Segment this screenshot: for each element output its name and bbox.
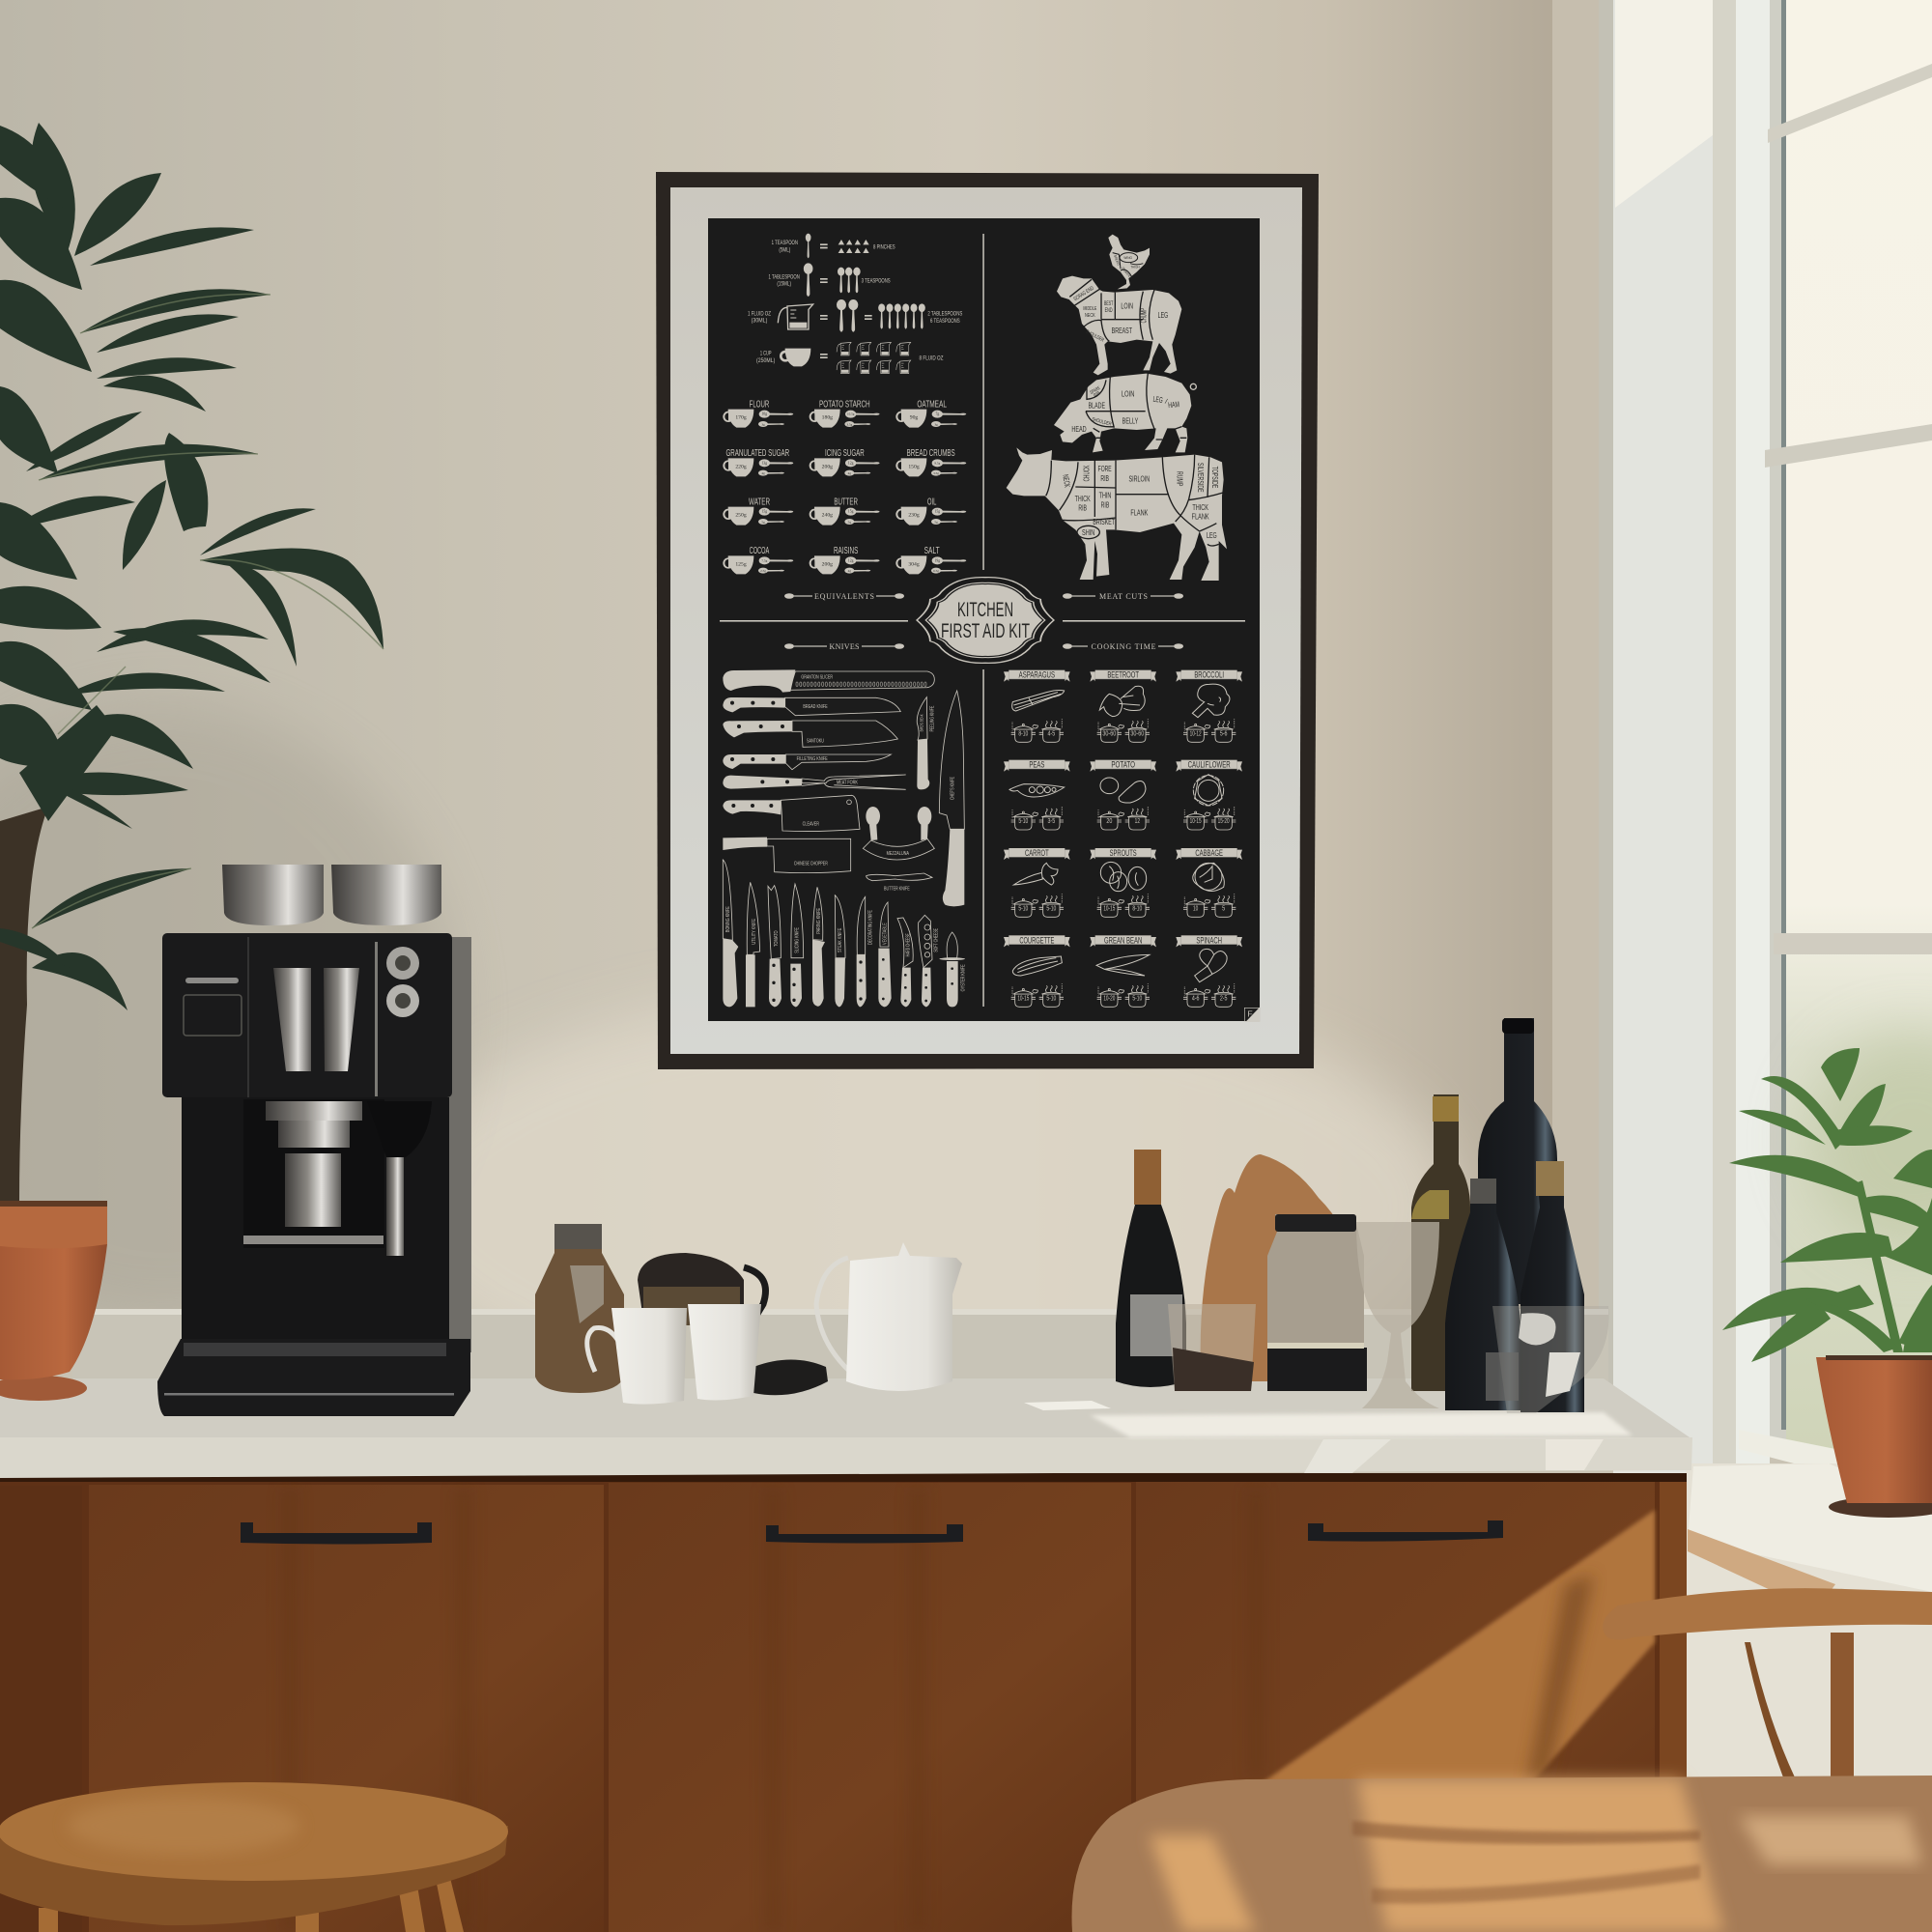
conversion: tablespoon: (15ML) [777, 281, 791, 288]
lamb [1057, 276, 1181, 375]
conversion: fluid oz: 6 TEASPOONS [930, 318, 960, 325]
lamb: NECK [1085, 313, 1095, 319]
right terracotta pot [1816, 1355, 1932, 1518]
knife labels: UTILITY KNIFE [752, 919, 757, 945]
ingredient: butter: BUTTER [834, 497, 858, 507]
ingredient: bread crumbs: 9.5g [934, 461, 941, 465]
plant leaf veins [32, 294, 384, 928]
cow [1007, 447, 1227, 581]
title badge [916, 577, 1055, 664]
cow: FLANK [1130, 508, 1149, 518]
cow: RIB [1101, 499, 1110, 509]
conversion: fluid oz [748, 299, 962, 332]
cow: NECK [1061, 473, 1072, 488]
ingredient: oil: 15g [935, 510, 940, 514]
knife labels: CLEAVER [803, 821, 819, 827]
cow: FORE [1098, 464, 1112, 473]
ingredient: salt: 6.5g [933, 569, 939, 573]
cabinet [0, 1473, 1687, 1932]
wine bottle [1116, 1150, 1186, 1387]
ingredient: water: WATER [749, 497, 770, 507]
cow: RIB [1078, 503, 1087, 513]
cow: RUMP [1175, 471, 1184, 487]
lamb: CHUMP [1138, 308, 1148, 323]
banner titles: CABBAGE [1195, 848, 1223, 858]
ingredient: salt: 304g [908, 561, 920, 567]
ingredient: potato starch: 10.5g [847, 412, 855, 416]
cooking time numbers: 2-5 [1220, 995, 1228, 1002]
machine steel parts [184, 937, 432, 1256]
ingredient: salt [895, 546, 966, 574]
cooking time panel [1004, 670, 1260, 1022]
ingredient: icing sugar: ICING SUGAR [825, 448, 865, 459]
ingredient: bread crumbs [895, 448, 966, 476]
conversion: cup [756, 342, 944, 374]
section label: meat cuts: MEAT CUTS [1099, 592, 1148, 601]
ingredient: raisins: 4g [848, 569, 851, 573]
cow: LEG [1207, 530, 1217, 540]
conversion: fluid oz: 1 FLUID OZ [748, 310, 771, 317]
lamb: MIDDLE [1083, 306, 1096, 312]
pig: LOIN [1122, 388, 1134, 398]
cooking time numbers: 5-10 [1018, 905, 1028, 912]
ingredient: potato starch: 180g [822, 415, 833, 421]
dividers [720, 234, 1245, 1007]
ingredient: icing sugar: 12g [848, 461, 854, 465]
pig: BLADE [1089, 400, 1105, 410]
pig: RIB [1093, 390, 1101, 399]
pots with boiling and steaming times [1011, 719, 1236, 1007]
chicken [1108, 235, 1150, 289]
cooking time numbers: 15-20 [1218, 818, 1230, 825]
lamb: SCRAG END [1073, 286, 1095, 302]
equivalents panel [723, 234, 966, 574]
cooking time numbers: 4-5 [1047, 730, 1055, 737]
cooking time numbers: 8-10 [1132, 905, 1142, 912]
lamb: LOIN [1121, 300, 1133, 310]
cooking time numbers: 12 [1135, 818, 1140, 825]
cooking time numbers: 10-20 [1103, 995, 1115, 1002]
knife labels: MEAT FORK [837, 780, 858, 785]
knife labels: TOMATO [774, 930, 780, 947]
grinder hoppers [222, 865, 441, 925]
knife labels: SANTOKU [807, 738, 824, 744]
ingredient: butter: 5g [848, 520, 851, 524]
knife labels: STEAK KNIFE [838, 928, 843, 952]
dark dish [753, 1360, 828, 1395]
ingredient: cocoa: COCOA [750, 546, 770, 556]
pig: HEAD [1071, 424, 1087, 434]
knife labels: SOFT CHEESE [933, 928, 939, 952]
wall background [0, 0, 1557, 1430]
right plant [1722, 1048, 1932, 1518]
ingredient: bread crumbs: 150g [908, 464, 920, 469]
section label: meat cuts [1063, 592, 1183, 601]
chicken: THIGH [1130, 266, 1140, 270]
cooking time numbers: 10-12 [1190, 730, 1202, 737]
cooking time numbers: 30-60 [1102, 730, 1116, 737]
ingredient: water [723, 497, 793, 526]
cooking time numbers: 10 [1193, 905, 1198, 912]
knife labels: BREAD KNIFE [803, 704, 828, 710]
title badge: FIRST AID KIT [941, 620, 1030, 642]
ingredient: water: 5g [761, 520, 765, 524]
knife labels: HARD CHEESE [906, 933, 912, 956]
ingredient: raisins [810, 546, 880, 574]
backsplash [72, 1309, 1608, 1381]
ingredient: raisins: RAISINS [834, 546, 859, 556]
title badge: KITCHEN [957, 599, 1013, 621]
lamb: END [1105, 308, 1113, 314]
ingredient: butter: 15g [848, 510, 854, 514]
ingredient: icing sugar: 200g [822, 464, 833, 469]
glass jar [535, 1224, 624, 1393]
ingredient: icing sugar: 4g [848, 471, 851, 475]
right plant leaves [1722, 1048, 1932, 1362]
ingredient: raisins: 12g [848, 558, 854, 562]
banner titles: SPROUTS [1110, 848, 1137, 858]
picture frame [656, 172, 1319, 1069]
pig: / [1164, 399, 1168, 406]
banner titles: SPINACH [1196, 935, 1222, 945]
granton dimples [795, 679, 927, 689]
ingredient: oatmeal: 90g [910, 415, 918, 421]
knife labels: SLICING KNIFE [795, 927, 801, 953]
cabinet handles [241, 1520, 1503, 1544]
knife labels: BUTTER KNIFE [884, 886, 910, 892]
ingredient: oatmeal [895, 399, 966, 428]
cooking time numbers: 5 [1222, 905, 1225, 912]
ingredient: bread crumbs: BREAD CRUMBS [907, 448, 955, 459]
window sill and lower wall [1686, 1463, 1932, 1932]
knife labels: OYSTER KNIFE [960, 964, 966, 991]
ingredient: oil: 230g [908, 513, 920, 519]
conversion: tablespoon [768, 263, 891, 297]
section label: cooking time: COOKING TIME [1092, 642, 1156, 651]
knife labels: BIRD'S BEAK [920, 714, 924, 731]
conversion: tablespoon: 1 TABLESPOON [768, 273, 800, 280]
poster [708, 218, 1260, 1022]
conversion: teaspoon: (5ML) [779, 247, 790, 254]
ingredient: salt: 19g [935, 558, 940, 562]
ingredient: flour: 3g [761, 422, 765, 426]
conversion: fluid oz: (30ML) [752, 317, 767, 324]
ingredient: cocoa [723, 546, 793, 574]
lamb: SHOULDER [1085, 329, 1105, 344]
chicken: WING [1123, 256, 1132, 260]
ingredient: flour: 10g [762, 412, 767, 416]
handle rivets [730, 701, 953, 1002]
ingredient: cocoa: 125g [735, 561, 747, 567]
ingredient: water: 15g [762, 510, 767, 514]
conversion: fluid oz: 2 TABLESPOONS [927, 311, 962, 318]
cooking time numbers: 5-10 [1132, 995, 1142, 1002]
knives panel [723, 669, 966, 1007]
ingredient: oil: 5g [934, 520, 938, 524]
conversion: cup: 1 CUP [760, 350, 771, 356]
knife labels: FILLETING KNIFE [797, 756, 828, 762]
knife labels: BONING KNIFE [725, 906, 731, 932]
ingredient: cocoa: 7.5g [761, 558, 768, 562]
pig: BELLY [1122, 416, 1139, 426]
ingredient: granulated sugar: 13g [762, 461, 767, 465]
cooking time numbers: 10-15 [1190, 818, 1202, 825]
banner titles [1019, 670, 1231, 945]
knife labels: CHEF'S KNIFE [950, 777, 955, 800]
conversion: cup: (250ML) [756, 357, 775, 364]
cow: CHUCK [1081, 465, 1091, 481]
banner titles: PEAS [1029, 760, 1044, 770]
knife labels: PARING KNIFE [816, 908, 822, 934]
conversion: teaspoon: 1 TEASPOON [772, 240, 798, 246]
meat cuts panel [1007, 235, 1227, 581]
ingredient: icing sugar [810, 448, 880, 476]
ingredient: oatmeal: OATMEAL [917, 399, 947, 410]
cow: THIN [1099, 491, 1111, 500]
coffee machine [157, 865, 471, 1416]
knife labels: MEZZALUNA [887, 851, 909, 857]
lamb: LEG [1158, 310, 1168, 320]
cooking time numbers [1017, 730, 1230, 1002]
front dark bottle [1445, 1179, 1520, 1410]
chicken: DRUMSTICK [1121, 267, 1133, 280]
blade outlines [723, 671, 964, 968]
knife labels: CHINESE CHOPPER [794, 861, 828, 867]
dark coffee press [638, 1253, 765, 1325]
conversion: teaspoon: 8 PINCHES [873, 244, 895, 251]
table [1072, 1776, 1932, 1932]
ingredient: cocoa: 2.5g [760, 569, 766, 573]
banner titles: POTATO [1111, 760, 1135, 770]
section label: equivalents: EQUIVALENTS [814, 592, 874, 601]
glass bowl and reflections [1486, 1306, 1608, 1413]
conversion: tablespoon: 3 TEASPOONS [862, 278, 891, 285]
plant leaves [0, 123, 384, 1010]
ingredient: granulated sugar: GRANULATED SUGAR [725, 448, 789, 459]
lamb: BEST [1104, 301, 1114, 307]
left terracotta pot [0, 1201, 107, 1401]
cooking time numbers: 10-15 [1103, 905, 1115, 912]
ingredient: oil [895, 497, 966, 526]
white pitcher [816, 1242, 962, 1391]
section label: cooking time [1063, 642, 1183, 651]
ingredient: oatmeal: 7g [936, 412, 939, 416]
right dark bottle [1520, 1161, 1584, 1412]
vegetable icons [1009, 684, 1230, 982]
pig: HAM [1168, 399, 1179, 410]
knife labels: VEGETABLE [883, 923, 889, 945]
ingredient: potato starch: POTATO STARCH [819, 399, 870, 410]
knife labels: DECORATING KNIFE [868, 910, 874, 945]
banner titles: COURGETTE [1019, 935, 1054, 945]
ingredient: butter [810, 497, 880, 526]
cooking time numbers: 10-15 [1017, 995, 1029, 1002]
cooking time numbers: 20 [1106, 818, 1112, 825]
knife handles [723, 669, 965, 1007]
pig [1054, 374, 1196, 452]
ingredient: salt: SALT [924, 546, 940, 556]
cow: THICK [1192, 502, 1208, 512]
chicken: BREAST [1113, 255, 1121, 267]
cow: SIRLOIN [1128, 474, 1150, 484]
ingredient: granulated sugar: 4g [761, 471, 765, 475]
banner titles: BEETROOT [1107, 670, 1139, 680]
logo corner [1244, 1008, 1260, 1022]
ingredient: raisins: 200g [822, 561, 833, 567]
cow: FLANK [1192, 512, 1209, 522]
ingredient: potato starch: 3.5g [846, 422, 853, 426]
cooking time numbers: 5-10 [1046, 995, 1056, 1002]
banner titles: BROCCOLI [1194, 670, 1224, 680]
cooking time numbers: 4-6 [1192, 995, 1200, 1002]
section label: knives [784, 642, 904, 651]
ingredient: oil: OIL [927, 497, 937, 507]
cooking time numbers: 5-10 [1018, 818, 1028, 825]
ingredient: granulated sugar [723, 448, 793, 476]
section label: knives: KNIVES [829, 642, 860, 651]
banner titles: CAULIFLOWER [1188, 760, 1231, 770]
white mugs [587, 1304, 761, 1405]
cow: SILVERSIDE [1196, 463, 1206, 493]
ingredient: butter: 240g [822, 513, 833, 519]
cow: BRISKET [1093, 517, 1115, 526]
ingredient: granulated sugar: 220g [735, 464, 747, 469]
ingredient: oatmeal: 3g [934, 422, 938, 426]
pig: LEG [1152, 394, 1163, 405]
ingredient: flour [723, 399, 793, 428]
cooking time numbers: 3-5 [1047, 818, 1055, 825]
window glass with glazing bars [1739, 0, 1932, 1507]
counter [0, 1378, 1692, 1478]
tall dark bottle [1478, 1018, 1557, 1304]
banners [1004, 670, 1242, 947]
banner titles: ASPARAGUS [1019, 670, 1055, 680]
conversion: teaspoon [772, 234, 895, 258]
ingredient: water: 250g [735, 513, 747, 519]
section label: equivalents [784, 592, 904, 601]
banner titles: GREAN BEAN [1104, 935, 1142, 945]
knife labels [725, 674, 966, 991]
banner titles: CARROT [1025, 848, 1049, 858]
window wall and reveal [1552, 0, 1787, 1507]
carafe [1267, 1214, 1367, 1391]
cooking time numbers: 5-10 [1046, 905, 1056, 912]
ingredient: flour: FLOUR [750, 399, 769, 410]
left plant [0, 123, 384, 1201]
stool [0, 1782, 508, 1932]
conversion: cup: 8 FLUID OZ [919, 355, 944, 362]
cooking time numbers: 5-6 [1220, 730, 1228, 737]
knife labels: PEELING KNIFE [930, 706, 936, 731]
cow: RIB [1100, 473, 1109, 483]
plant trunk [0, 807, 48, 1201]
tumbler [1168, 1304, 1256, 1391]
lamb: BREAST [1112, 326, 1132, 335]
glass goblet [1356, 1222, 1439, 1408]
cooking time numbers: 30-60 [1130, 730, 1144, 737]
cow: THICK [1075, 494, 1091, 503]
cooking time numbers: 8-10 [1018, 730, 1028, 737]
gold bottle [1411, 1094, 1470, 1391]
cow: TOPSIDE [1210, 467, 1220, 489]
ingredient: bread crumbs: 3.5g [933, 471, 939, 475]
chair [1603, 1588, 1932, 1777]
pig: SPARE [1089, 385, 1102, 396]
logo corner: F [1247, 1009, 1253, 1019]
cow: SHIN [1082, 527, 1094, 537]
knife labels: GRANTON SLICER [801, 674, 833, 680]
ingredient: potato starch [810, 399, 880, 428]
pig: SHOULDER [1092, 416, 1112, 428]
ingredient: flour: 170g [735, 415, 747, 421]
cutting board [1201, 1154, 1352, 1381]
